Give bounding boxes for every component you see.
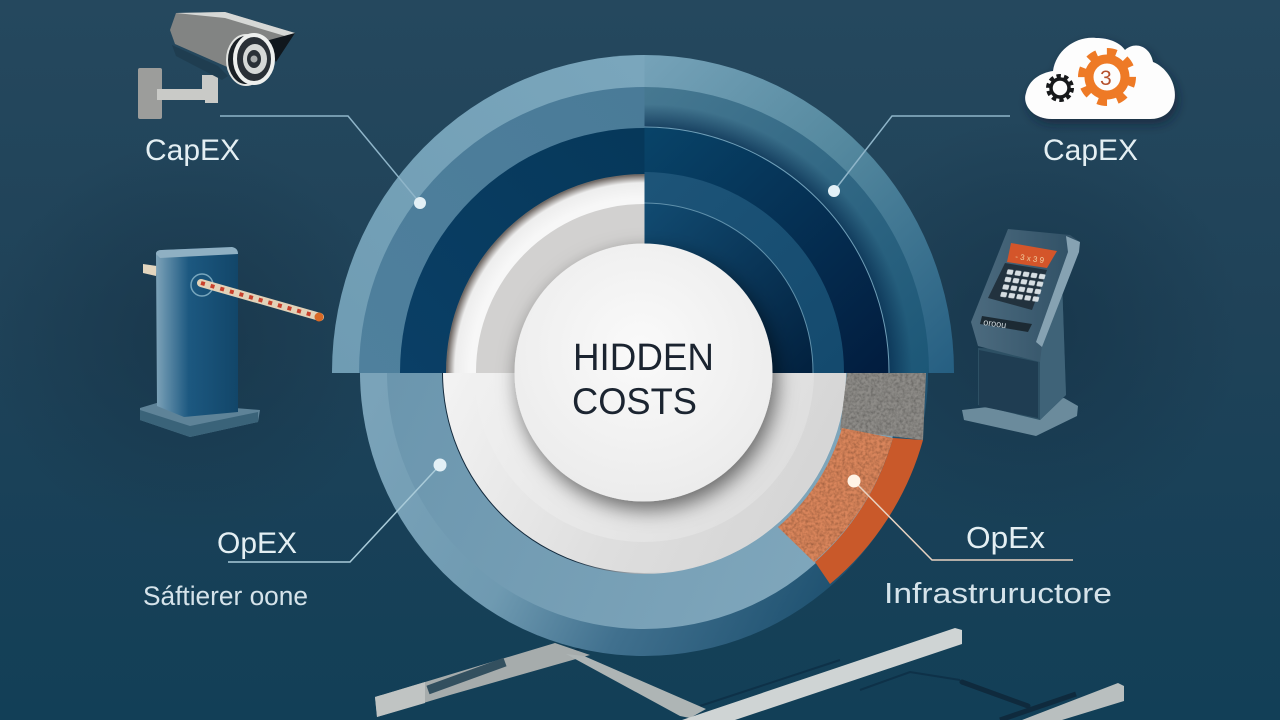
icon: orange gear [1083, 53, 1131, 101]
icon: security camera [138, 12, 295, 119]
label: software line: Sáftierer oone [143, 581, 308, 611]
label: infrastructure line: Infrastruructore [884, 578, 1112, 610]
icon: payment kiosk: oroou [983, 317, 1007, 330]
centre disc with title [514, 244, 772, 502]
callout: upper right [828, 116, 1010, 197]
steel bars under the chart [375, 628, 1124, 720]
segment: lower OpEX software ring [360, 373, 928, 656]
icon: payment kiosk [962, 229, 1080, 436]
label: capex right: CapEX [1043, 134, 1138, 167]
segment: upper left CapEX rings [332, 55, 644, 373]
icon: payment kiosk: - 3 x 3 9 [1015, 252, 1045, 265]
segment: dark orange wedge [815, 438, 923, 584]
callout: lower left [228, 458, 446, 562]
label: opex right: OpEx [966, 520, 1046, 555]
segment: upper right CapEX rings [644, 55, 954, 373]
segment: grey concrete wedge [840, 373, 926, 440]
label: opex left: OpEX [217, 527, 297, 560]
callout: lower right [848, 474, 1073, 560]
segment: light orange wedge [778, 428, 893, 562]
panel: donut chart [332, 55, 956, 689]
label: capex left: CapEX [145, 134, 240, 167]
callout: upper left [220, 116, 426, 209]
icon: parking barrier [140, 247, 324, 437]
icon: orange gear: 3 [1100, 67, 1112, 90]
title: hidden: HIDDEN [573, 337, 714, 379]
title: costs: COSTS [572, 381, 697, 422]
icon: cloud with gears [1025, 38, 1175, 119]
icon: black gear [1049, 77, 1071, 99]
